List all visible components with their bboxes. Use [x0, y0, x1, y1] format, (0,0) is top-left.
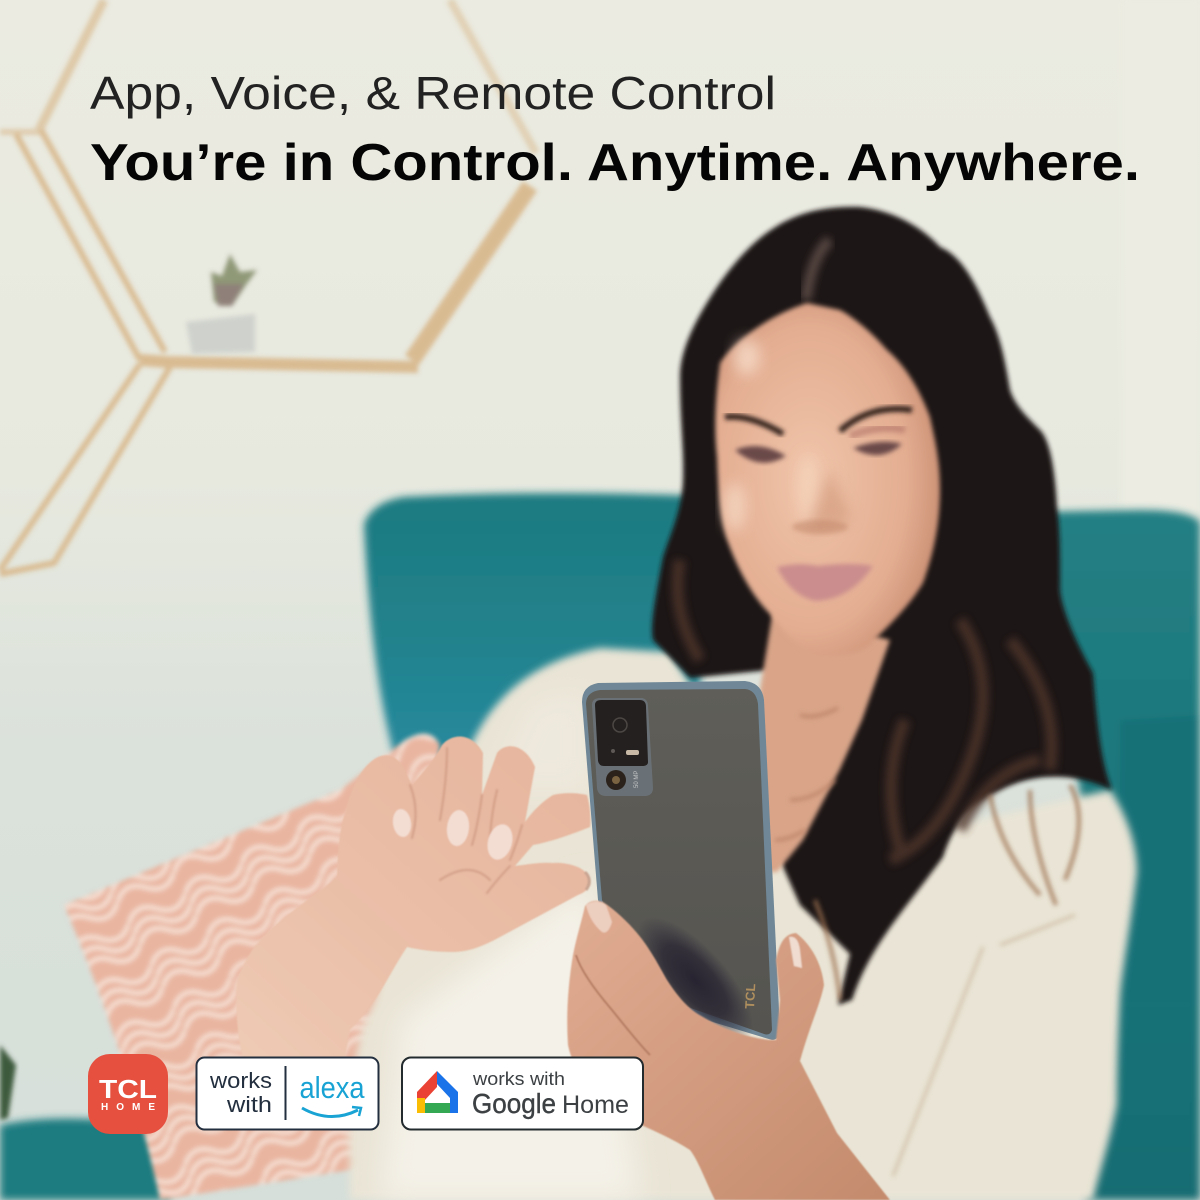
neck shadow	[775, 708, 838, 840]
patterned pillow	[64, 734, 440, 1200]
woman: sweater	[349, 648, 1137, 1200]
plant at left edge	[0, 1045, 16, 1120]
woman: neck and chest	[760, 610, 890, 872]
camera module: 50 MP	[634, 771, 640, 788]
title: headline: You’re in Control. Anytime. Anywhere.	[90, 134, 1140, 192]
fingernails	[391, 808, 516, 862]
armchair	[0, 493, 1200, 1200]
camera module	[592, 698, 653, 796]
works with Alexa badge: with	[226, 1092, 272, 1117]
TCL Home badge	[88, 1054, 168, 1134]
works with Alexa badge: works	[209, 1068, 272, 1093]
works with Google Home badge	[402, 1058, 643, 1130]
works with Google Home badge: Home	[562, 1091, 629, 1119]
TCL Home badge: TCL	[99, 1074, 157, 1104]
works with Alexa badge	[196, 1058, 378, 1130]
hair wisps over sweater	[815, 785, 1079, 1000]
left hand and forearm	[236, 736, 591, 1058]
hexagon wall shelf	[0, 0, 536, 574]
smartphone back	[582, 681, 780, 1061]
shelf plant	[186, 254, 257, 354]
sweater seam	[893, 915, 1075, 1176]
icon: Google Home house	[417, 1071, 458, 1113]
right hand holding phone	[567, 901, 890, 1200]
phone logo: TCL	[742, 983, 758, 1009]
TCL Home badge: HOME	[101, 1102, 155, 1113]
woman: face	[715, 303, 940, 655]
works with Google Home badge: Google	[472, 1088, 556, 1119]
title: subheading: App, Voice, & Remote Control	[90, 67, 776, 119]
works with Google Home badge: works with	[472, 1069, 565, 1089]
works with Alexa badge: alexa	[300, 1070, 365, 1105]
woman: hair	[652, 207, 1112, 1005]
